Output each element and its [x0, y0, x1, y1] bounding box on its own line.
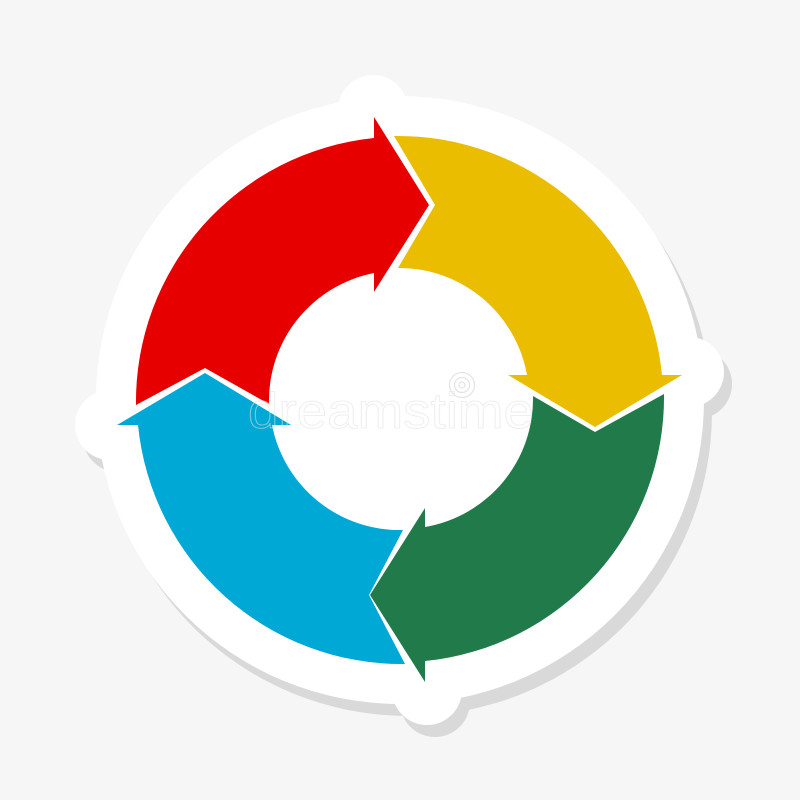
arrow: blue — [117, 373, 405, 664]
watermark text: dreamstime — [248, 383, 534, 439]
sticker shadow — [83, 87, 732, 737]
sticker white base — [75, 75, 724, 725]
arrow: green — [370, 394, 664, 682]
watermark icon — [450, 372, 474, 398]
arrow: red — [136, 117, 429, 405]
arrow: yellow — [394, 136, 682, 427]
